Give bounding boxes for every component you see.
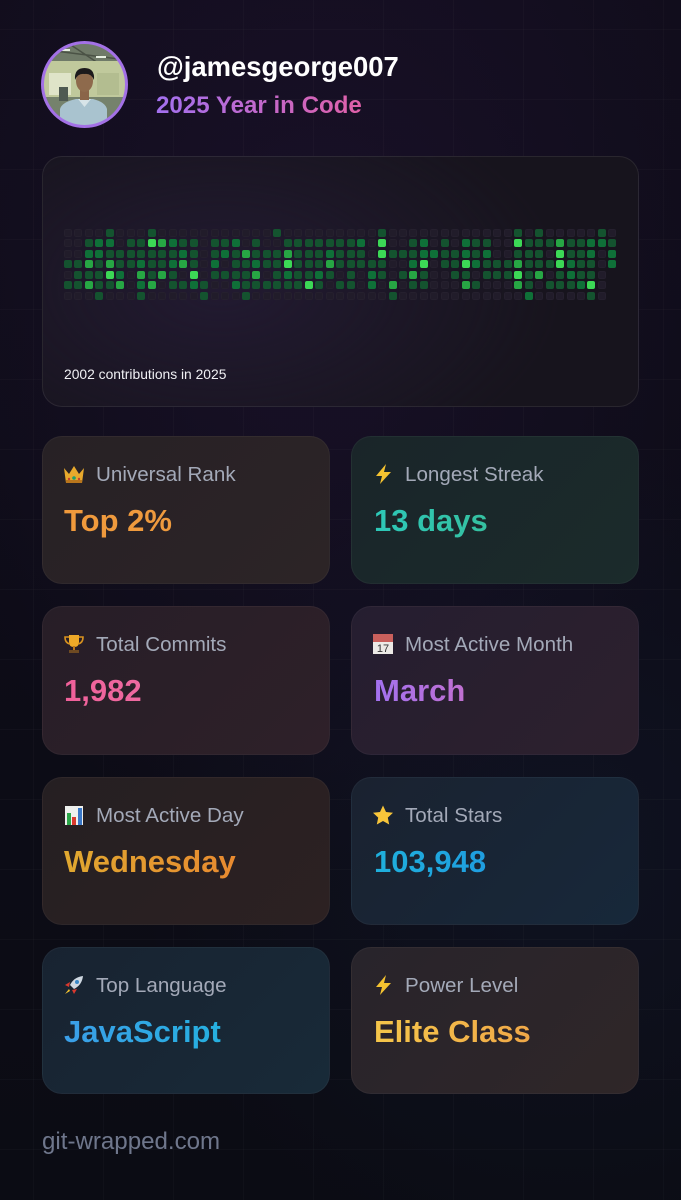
value: Wednesday: [64, 844, 236, 879]
value: Top 2%: [64, 503, 172, 538]
icon: lightning: [376, 464, 391, 484]
panel: top language: [42, 947, 330, 1094]
value: JavaScript: [64, 1014, 221, 1049]
icon: rocket: [65, 976, 83, 994]
panel: contribution graph: [42, 156, 639, 407]
panel: total stars: [351, 777, 639, 925]
label: Longest Streak: [405, 462, 544, 486]
avatar: [41, 41, 128, 128]
icon: trophy: [64, 635, 84, 653]
panel: total commits: [42, 606, 330, 755]
icon: calendar: 17: [377, 643, 389, 655]
value: 13 days: [374, 503, 488, 538]
icon: crown: [64, 466, 84, 483]
subtitle: 2025 Year in Code: [156, 92, 362, 119]
label: Power Level: [405, 974, 518, 996]
label: Total Stars: [405, 804, 502, 826]
label: Most Active Month: [405, 632, 573, 656]
label: Universal Rank: [96, 462, 236, 486]
contribution heatmap: [64, 229, 616, 300]
icon: star: [373, 806, 393, 824]
icon: bar chart: [65, 806, 83, 825]
value: Elite Class: [374, 1014, 531, 1049]
value: March: [374, 673, 465, 708]
contributions caption: 2002 contributions in 2025: [64, 366, 226, 382]
panel: power level: [351, 947, 639, 1094]
username: @jamesgeorge007: [157, 51, 399, 82]
panel: universal rank: [42, 436, 330, 584]
icon: lightning: [376, 975, 391, 995]
value: 103,948: [374, 844, 486, 879]
footer: git-wrapped.com: [42, 1128, 220, 1155]
label: Most Active Day: [96, 804, 244, 826]
label: Top Language: [96, 974, 227, 996]
panel: most active day: [42, 777, 330, 925]
value: 1,982: [64, 673, 142, 708]
icon: calendar: [373, 634, 393, 655]
panel: most active month: [351, 606, 639, 755]
label: Total Commits: [96, 632, 226, 656]
panel: longest streak: [351, 436, 639, 584]
